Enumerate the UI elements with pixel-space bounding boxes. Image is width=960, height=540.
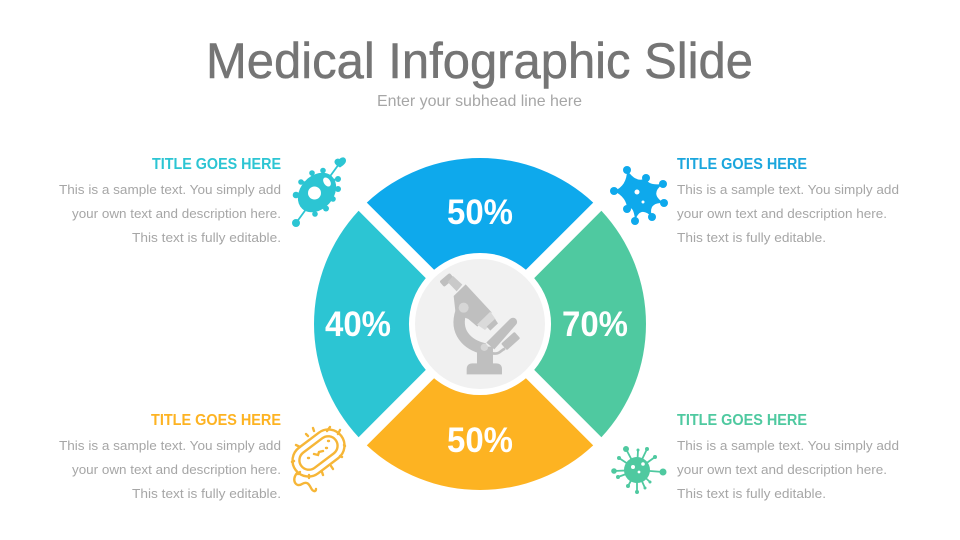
panel: bottom right text: This text is fully editable. bbox=[677, 487, 826, 501]
panel: bottom left text: This text is fully editable. bbox=[132, 487, 281, 501]
panel: bottom left text bbox=[59, 412, 281, 501]
panel: bottom left text: This is a sample text. You simply add bbox=[59, 439, 281, 453]
icon: microscope bbox=[439, 273, 520, 374]
segment: cyan 40%: 40% bbox=[325, 305, 391, 344]
panel: top right text: TITLE GOES HERE bbox=[677, 156, 807, 173]
panel: bottom right text bbox=[677, 412, 899, 501]
panel: bottom right text: This is a sample text. You simply add bbox=[677, 439, 899, 453]
subhead: Enter your subhead line here bbox=[377, 93, 582, 110]
center circle bbox=[415, 259, 545, 389]
panel: bottom left text: your own text and description here. bbox=[72, 463, 281, 477]
icon: cyan bacterium bbox=[290, 157, 346, 227]
icon: blue cell bbox=[610, 166, 668, 225]
panel: top left text bbox=[59, 156, 281, 245]
segment: green 70% bbox=[534, 211, 646, 437]
panel: bottom right text: TITLE GOES HERE bbox=[677, 412, 807, 429]
segment: orange 50% bbox=[367, 378, 593, 490]
panel: top left text: This is a sample text. You simply add bbox=[59, 183, 281, 197]
segment: blue 50%: 50% bbox=[447, 193, 513, 232]
panel: top right text: your own text and description here. bbox=[677, 207, 887, 221]
panel: top right text: This is a sample text. You simply add bbox=[677, 183, 899, 197]
segment: green 70%: 70% bbox=[562, 305, 628, 344]
icon: orange bacillus bbox=[286, 423, 351, 491]
segment: blue 50% bbox=[367, 158, 593, 270]
panel: top right text: This text is fully editable. bbox=[677, 231, 826, 245]
panel: top left text: This text is fully editable. bbox=[132, 231, 281, 245]
segment: orange 50%: 50% bbox=[447, 421, 513, 460]
panel: top right text bbox=[677, 156, 899, 245]
panel: bottom right text: your own text and description here. bbox=[677, 463, 887, 477]
panel: top left text: your own text and description here. bbox=[72, 207, 281, 221]
title: Medical Infographic Slide bbox=[206, 33, 753, 89]
panel: bottom left text: TITLE GOES HERE bbox=[151, 412, 281, 429]
segment: cyan 40% bbox=[314, 211, 426, 437]
panel: top left text: TITLE GOES HERE bbox=[152, 156, 281, 173]
icon: green virus bbox=[611, 446, 666, 494]
